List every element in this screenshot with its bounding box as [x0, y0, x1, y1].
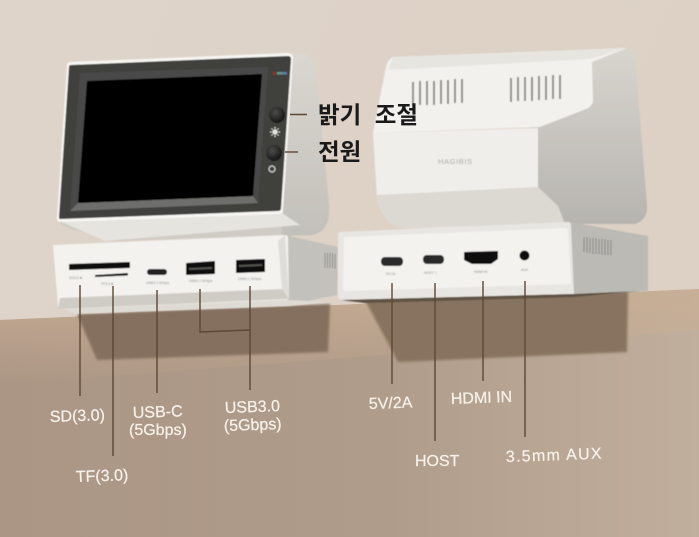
dock underside: [340, 291, 640, 303]
label: HDMI IN: HDMI IN: [451, 389, 512, 408]
USB-A port 2: [236, 259, 265, 273]
5V port: [381, 257, 403, 266]
brand text: HAGIBIS: [438, 157, 473, 166]
monitor body side: [57, 53, 329, 241]
label: USB-C: USB-C: [133, 403, 183, 422]
monitor front frame: [57, 53, 293, 222]
monitor side: [530, 48, 647, 224]
HDMI port: [464, 251, 498, 264]
label: power: 전원: [318, 139, 361, 165]
dock front lower bevel: [58, 289, 289, 309]
label: 5V/2A: 5V/2A: [369, 394, 413, 413]
label: USB3.0 speed: (5Gbps): [224, 416, 282, 435]
icon: power ring: [269, 166, 275, 172]
port caption USB-C: USB3.1 5Gbps: [146, 281, 170, 285]
dock front: [338, 222, 574, 300]
port caption USB-A 1: USB3.1 5Gbps: [189, 279, 213, 283]
status LEDs: [273, 72, 287, 75]
caption HDMI: HDMI IN: [474, 270, 488, 274]
leader lines: [80, 114, 525, 456]
caption AUX: AUX: [521, 268, 529, 272]
caption HOST: HOST □: [424, 271, 438, 275]
AUX jack: [520, 250, 530, 260]
label: TF: TF(3.0): [76, 467, 129, 486]
label: USB-C speed: (5Gbps): [129, 422, 187, 439]
HOST port: [423, 255, 444, 264]
dock front: [53, 235, 289, 309]
left monitor and dock: [53, 53, 338, 314]
label: HOST: HOST: [415, 453, 460, 470]
inner bezel lower face: [70, 196, 258, 211]
monitor rear lower: [373, 128, 560, 228]
dock side: [570, 222, 648, 294]
dark bezel: [59, 56, 291, 219]
dock front inner face: [343, 228, 571, 291]
label: 3.5mm AUX: 3.5mm AUX: [506, 446, 603, 466]
dock right bevel: [278, 235, 289, 299]
shadow under left dock: [77, 304, 330, 360]
TF card slot: [95, 273, 128, 277]
port caption TF: TF3.0 ■: [101, 282, 113, 286]
vent group 2: [511, 75, 560, 102]
SD card slot: [69, 262, 130, 270]
power knob: [266, 145, 282, 161]
USB-A port 1: [186, 261, 215, 275]
port caption SD: SD3.0 ■: [69, 276, 82, 280]
screen: [78, 74, 262, 203]
port caption USB-A 2: USB3.1 5Gbps: [238, 277, 262, 281]
shadow under right dock: [365, 292, 628, 362]
icon: brightness sun: [270, 127, 280, 137]
label: USB3.0: USB3.0: [225, 398, 280, 417]
vent group 1: [413, 79, 462, 106]
side vents: [584, 237, 611, 255]
side vents: [325, 253, 335, 269]
caption 5V: 5V-2A: [386, 272, 396, 276]
label: brightness control: 밝기 조절: [318, 102, 418, 128]
shelf top highlight: [0, 289, 699, 385]
inner bezel: [70, 67, 268, 211]
label: SD: SD(3.0): [50, 407, 105, 426]
shelf surface: [0, 289, 699, 537]
brightness knob: [269, 107, 285, 123]
USB-C port: [147, 269, 167, 275]
dock side: [285, 235, 338, 305]
monitor rear top: [373, 48, 627, 133]
right monitor and dock: [338, 48, 648, 303]
dock underside: [65, 300, 331, 314]
